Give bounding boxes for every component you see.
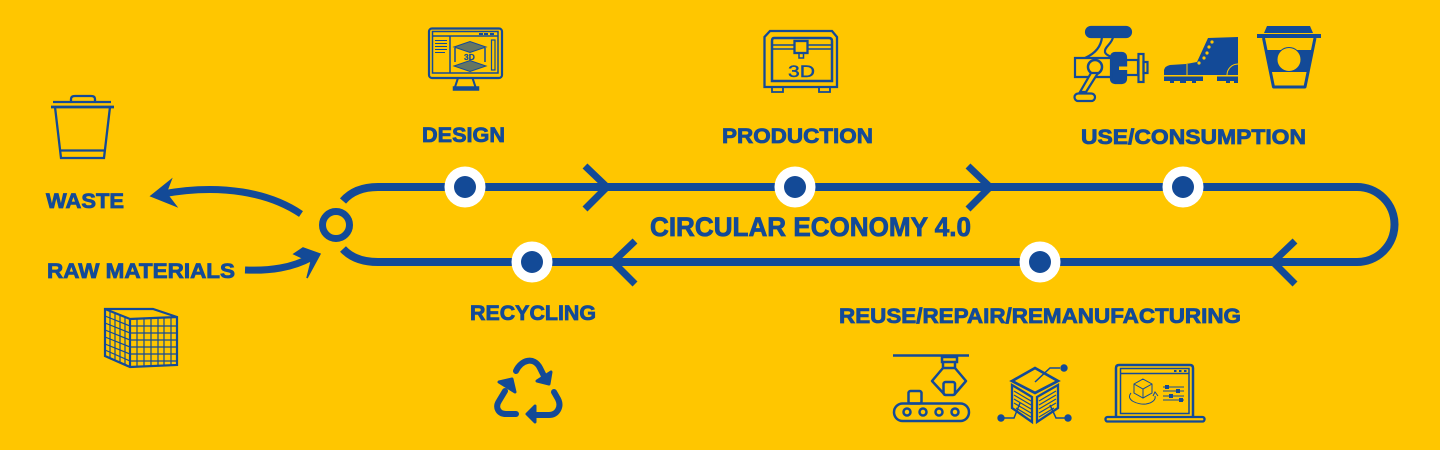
icon text: 3D on printer: 3D <box>788 62 815 81</box>
icon: robotic arm and conveyor <box>893 356 969 421</box>
label: reuse/repair/remanufacturing: REUSE/REPAIR/REMANUFACTURING <box>839 304 1241 328</box>
arrow: production to use <box>968 166 990 209</box>
label: raw materials: RAW MATERIALS <box>47 259 235 283</box>
circular flow track <box>343 166 1395 284</box>
icon: laptop with 3D software <box>1106 365 1204 422</box>
label: use/consumption: USE/CONSUMPTION <box>1081 125 1306 149</box>
icon text: 3D on monitor: 3D <box>464 52 475 62</box>
arrow: to waste <box>151 180 301 214</box>
arrow: design to production <box>585 166 607 209</box>
icon: material cube grid <box>105 309 177 367</box>
node: use <box>1162 166 1204 208</box>
arrow: reuse to recycling <box>613 241 635 284</box>
node: recycling <box>512 242 552 282</box>
node: production <box>774 166 816 208</box>
arrow: from raw materials <box>245 248 320 278</box>
start ring <box>322 212 350 238</box>
node: design <box>444 166 486 208</box>
node: reuse <box>1020 242 1060 282</box>
label: waste: WASTE <box>46 189 124 213</box>
icon: recycling arrows <box>497 361 559 422</box>
icon: networked box <box>997 364 1072 422</box>
center heading: CIRCULAR ECONOMY 4.0 <box>650 212 971 242</box>
arrow: use to reuse <box>1273 241 1295 284</box>
icon: 3D printer <box>764 31 837 92</box>
icon: coffee cup <box>1257 26 1321 87</box>
icon: trash bin <box>51 96 114 158</box>
icon: boot <box>1164 37 1238 83</box>
label: design: DESIGN <box>422 123 505 147</box>
label: recycling: RECYCLING <box>470 301 596 325</box>
icon: monitor with 3D design <box>429 28 502 90</box>
label: production: PRODUCTION <box>722 124 873 148</box>
icon: fishing reel <box>1074 27 1148 101</box>
